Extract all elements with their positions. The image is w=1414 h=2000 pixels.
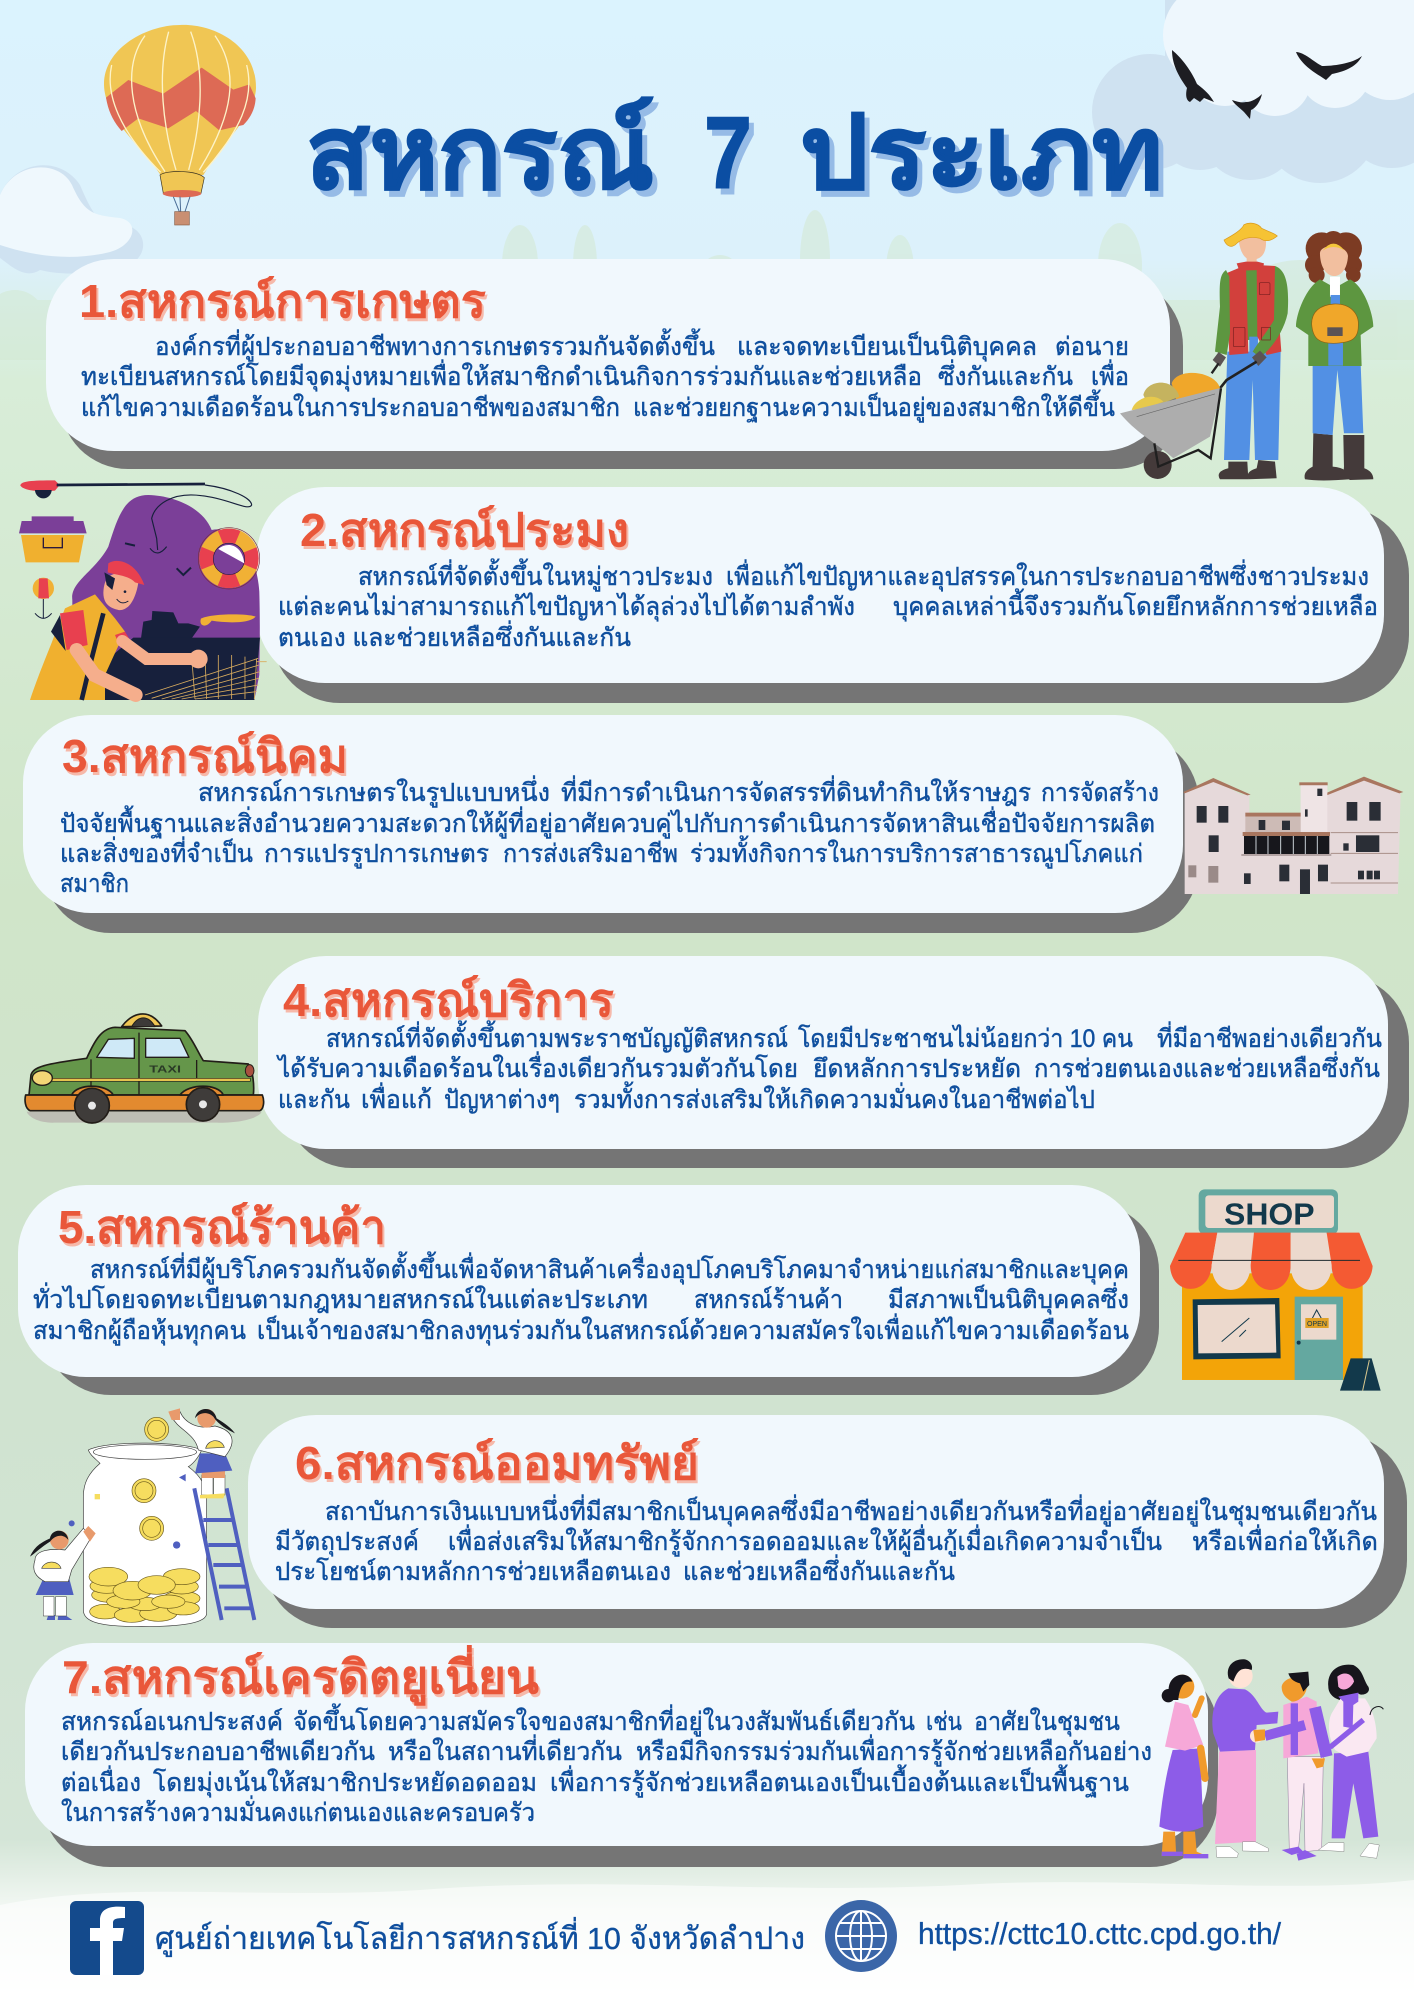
body text 4: ได้รับความเดือดร้อนในเรื่องเดียวกันรวมตัวกันโดย bbox=[276, 1051, 798, 1083]
body text 6: เพื่อส่งเสริมให้สมาชิกรู้จักการอดออมและให้ผู้อื่นกู้เมื่อเกิดความจำเป็น bbox=[448, 1524, 1162, 1557]
body text 5 bbox=[33, 1251, 1129, 1346]
body text 4: การช่วยตนเองและช่วยเหลือซึ่งกัน bbox=[1034, 1051, 1380, 1083]
body text 2 bbox=[278, 558, 1378, 652]
body text 7 bbox=[61, 1703, 1152, 1827]
body text 2: เพื่อแก้ไขปัญหาและอุปสรรคในการประกอบอาชีพซึ่งชาวประมง bbox=[726, 559, 1369, 592]
footer: organisation name: ศูนย์ถ่ายเทคโนโลยีการสหกรณ์ที่ 10 จังหวัดลำปาง bbox=[155, 1917, 805, 1957]
body text 5: สหกรณ์ที่มีผู้บริโภครวมกันจัดตั้งขึ้นเพื่อจัดหาสินค้าเครื่องอุปโภคบริโภคมาจำหน่ายแก่สมาชิกและบุคค bbox=[90, 1251, 1129, 1285]
panel 5: consumer cooperative bbox=[18, 1185, 1159, 1395]
birds bbox=[1172, 50, 1362, 119]
heading 3: 3.สหกรณ์นิคม bbox=[62, 730, 348, 782]
illustration: savings jar with girls bbox=[30, 1408, 254, 1627]
body text 1: ทะเบียนสหกรณ์โดยมีจุดมุ่งหมายเพื่อให้สมาชิกดำเนินกิจการร่วมกันและช่วยเหลือ bbox=[81, 359, 922, 392]
body text 7: สหกรณ์อเนกประสงค์ bbox=[61, 1708, 283, 1736]
body text 7: หรือมีกิจกรรมร่วมกันเพื่อการรู้จักช่วยเหลือกันอย่าง bbox=[636, 1734, 1152, 1767]
body text 2: แต่ละคนไม่าสามารถแก้ไขปัญหาได้ลุล่วงไปได้ตามลำพัง bbox=[278, 592, 855, 622]
body text 4: ปัญหาต่างๆ bbox=[444, 1086, 560, 1114]
panel 7: multipurpose credit union bbox=[25, 1643, 1218, 1867]
body text 4: ยึดหลักการประหยัด bbox=[813, 1055, 1021, 1083]
illustration: taxi: TAXI bbox=[149, 1065, 181, 1076]
heading 1: 1.สหกรณ์การเกษตร bbox=[79, 275, 486, 327]
illustration: people shaking hands bbox=[1159, 1659, 1383, 1861]
body text 3: การจัดสร้าง bbox=[1041, 779, 1159, 807]
body text 7: อาศัยในชุมชน bbox=[974, 1707, 1120, 1737]
body text 5: ทั่วไปโดยจดทะเบียนตามกฎหมายสหกรณ์ในแต่ละประเภท bbox=[33, 1282, 648, 1314]
panel 6: savings cooperative bbox=[248, 1415, 1407, 1628]
hot air balloon bbox=[104, 25, 256, 225]
body text 1: องค์กรที่ผู้ประกอบอาชีพทางการเกษตรรวมกันจัดตั้งขึ้น bbox=[155, 328, 715, 362]
body text 5: สมาชิกผู้ถือหุ้นทุกคน bbox=[33, 1317, 246, 1346]
heading 5: 5.สหกรณ์ร้านค้า bbox=[58, 1201, 386, 1253]
illustration: fisherman bbox=[19, 480, 267, 700]
cloud: left bbox=[0, 165, 143, 274]
body text 2: ตนเอง และช่วยเหลือซึ่งกันและกัน bbox=[278, 620, 631, 652]
illustration: buildings bbox=[1183, 777, 1403, 894]
body text 1: และจดทะเบียนเป็นนิติบุคคล bbox=[737, 331, 1037, 362]
title: สหกรณ์ bbox=[306, 96, 654, 210]
body text 3: สมาชิก bbox=[60, 870, 129, 898]
heading 7: 7.สหกรณ์เครดิตยูเนี่ยน bbox=[62, 1645, 540, 1706]
body text 6: สถาบันการเงินแบบหนึ่งที่มีสมาชิกเป็นบุคคลซึ่งมีอาชีพอย่างเดียวกันหรือที่อยู่อาศัยอยู่ในชุมชนเดียวกัน bbox=[325, 1494, 1377, 1527]
heading 6: 6.สหกรณ์ออมทรัพย์ bbox=[295, 1437, 699, 1489]
panel 3: land settlement cooperative bbox=[23, 715, 1199, 933]
body text 3: ปัจจัยพื้นฐานและสิ่งอำนวยความสะดวกให้ผู้ที่อยู่อาศัยควบคู่ไปกับการดำเนินการจัดหาสินเชื่อปัจจัยการผลิต bbox=[60, 805, 1155, 839]
body text 3 bbox=[60, 775, 1159, 898]
body text 1: และช่วยยกฐานะความเป็นอยู่ของสมาชิกให้ดีขึ้น bbox=[633, 389, 1115, 423]
illustration: taxi bbox=[25, 1014, 264, 1123]
body text 5: สหกรณ์ร้านค้า bbox=[694, 1286, 843, 1314]
body text 2: บุคคลเหล่านี้จึงรวมกันโดยยึกหลักการช่วยเหลือ bbox=[893, 588, 1378, 622]
body text 4: เพื่อแก้ bbox=[361, 1082, 432, 1114]
illustration: shop bbox=[1170, 1189, 1381, 1391]
body text 5: เป็นเจ้าของสมาชิกลงทุนร่วมกันในสหกรณ์ด้วยความสมัครใจเพื่อแก้ไขความเดือดร้อน bbox=[257, 1313, 1129, 1346]
body text 1: ต่อนาย bbox=[1055, 333, 1129, 361]
body text 6: และช่วยเหลือซึ่งกันและกัน bbox=[683, 1554, 955, 1586]
body text 7: ต่อเนื่อง bbox=[61, 1765, 141, 1797]
cloud: top right bbox=[1092, 0, 1414, 183]
title: ประเภท bbox=[800, 96, 1163, 210]
body text 4: รวมทั้งการส่งเสริมให้เกิดความมั่นคงในอาชีพต่อไป bbox=[574, 1081, 1095, 1114]
footer: globe icon bbox=[825, 1900, 897, 1972]
body text 5: มีสภาพเป็นนิติบุคคลซึ่ง bbox=[888, 1282, 1129, 1315]
body text 7: เพื่อการรู้จักช่วยเหลือตนเองเป็นเบื้องต้นและเป็นพื้นฐาน bbox=[550, 1764, 1129, 1798]
body text 1: เพื่อ bbox=[1091, 359, 1129, 391]
body text 4 bbox=[276, 1020, 1382, 1114]
body text 3: การแปรรูปการเกษตร bbox=[264, 840, 489, 869]
body text 4: และกัน bbox=[278, 1086, 350, 1114]
body text 7: หรือในสถานที่เดียวกัน bbox=[388, 1734, 622, 1766]
body text 6: หรือเพื่อก่อให้เกิด bbox=[1192, 1524, 1378, 1556]
body text 7: เช่น bbox=[926, 1708, 962, 1736]
body text 1: แก้ไขความเดือดร้อนในการประกอบอาชีพของสมาชิก bbox=[81, 393, 620, 422]
body text 7: เดียวกันประกอบอาชีพเดียวกัน bbox=[61, 1738, 375, 1766]
body text 3: ร่วมทั้งกิจการในการบริการสาธารณูปโภคแก่ bbox=[690, 835, 1143, 869]
body text 3: สหกรณ์การเกษตรในรูปแบบหนึ่ง bbox=[198, 775, 550, 808]
footer: facebook icon bbox=[70, 1901, 144, 1975]
body text 7: โดยมุ่งเน้นให้สมาชิกประหยัดอดออม bbox=[153, 1768, 537, 1798]
body text 1: ซึ่งกันและกัน bbox=[938, 359, 1073, 391]
body text 1 bbox=[81, 328, 1129, 423]
illustration: farmers with wheelbarrow bbox=[1120, 223, 1373, 480]
body text 3: ที่มีการดำเนินการจัดสรรที่ดินทำกินให้ราษฎร bbox=[561, 775, 1031, 807]
illustration: shop: OPEN bbox=[1307, 1321, 1327, 1328]
body text 4: ที่มีอาชีพอย่างเดียวกัน bbox=[1157, 1021, 1382, 1053]
body text 4: โดยมีประชาชนไม่น้อยกว่า 10 คน bbox=[798, 1024, 1133, 1053]
body text 4: สหกรณ์ที่จัดตั้งขึ้นตามพระราชบัญญัติสหกรณ์ bbox=[326, 1020, 788, 1053]
body text 3: และสิ่งของที่จำเป็น bbox=[60, 836, 253, 868]
heading 2: 2.สหกรณ์ประมง bbox=[300, 504, 629, 556]
panel 4: service cooperative bbox=[258, 956, 1409, 1168]
title: 7 bbox=[704, 96, 752, 210]
body text 3: การส่งเสริมอาชีพ bbox=[503, 840, 678, 868]
body text 6: ประโยชน์ตามหลักการช่วยเหลือตนเอง bbox=[275, 1557, 671, 1586]
body text 2: สหกรณ์ที่จัดตั้งขึ้นในหมู่ชาวประมง bbox=[358, 558, 713, 592]
body text 7: ในการสร้างความมั่นคงแก่ตนเองและครอบครัว bbox=[61, 1795, 535, 1827]
panel 2: fisheries cooperative bbox=[257, 487, 1409, 703]
body text 7: จัดขึ้นโดยความสมัครใจของสมาชิกที่อยู่ในวงสัมพันธ์เดียวกัน bbox=[293, 1703, 915, 1737]
illustration: shop: SHOP bbox=[1224, 1197, 1315, 1231]
footer: website url: https://cttc10.cttc.cpd.go.th/ bbox=[918, 1916, 1281, 1951]
body text 6 bbox=[275, 1494, 1378, 1586]
body text 6: มีวัตถุประสงค์ bbox=[275, 1528, 419, 1557]
panel 1: agricultural cooperative bbox=[46, 259, 1183, 469]
heading 4: 4.สหกรณ์บริการ bbox=[283, 974, 614, 1026]
title bbox=[306, 96, 1163, 210]
